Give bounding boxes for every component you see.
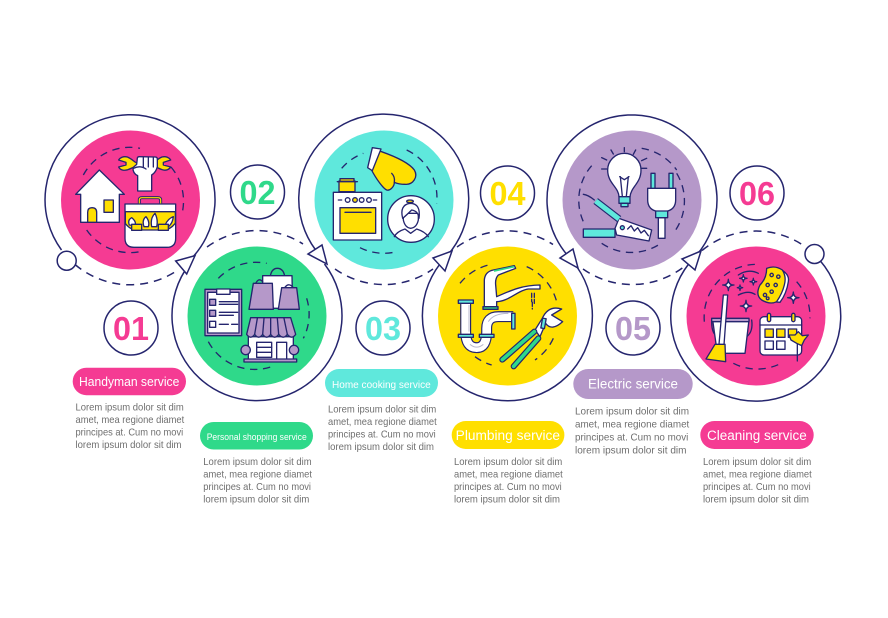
number badge 01: 01 [113,310,149,347]
label: home cooking service [325,369,438,397]
icon: end ring [805,244,824,264]
text: cleaning description: Lorem ipsum dolor sit dim [703,457,811,468]
text: shopping description [203,457,312,506]
text: cooking description: Lorem ipsum dolor sit dim [328,404,436,416]
arrow: step 3 to 4 [433,251,452,271]
panel: cooking circle [314,130,454,270]
text: handyman description: principes at. Cum no movi [76,428,183,438]
text: cleaning description: lorem ipsum dolor sit dim [703,494,809,506]
number badge 01 [104,301,158,355]
text: handyman description: Lorem ipsum dolor sit dim [76,402,184,414]
icon: handyman [76,147,184,253]
text: handyman description: amet, mea regione diamet [76,415,184,426]
text: electric description: principes at. Cum no movi [575,432,688,444]
label: handyman service: Handyman service [79,374,179,389]
number badge 04: 04 [490,175,526,212]
icon: start ring [57,251,76,270]
number badge 05: 05 [615,310,651,347]
number badge 04 [480,166,534,220]
text: electric description: amet, mea regione diamet [575,420,689,430]
text: shopping description: Lorem ipsum dolor sit dim [203,457,312,468]
number badge 03: 03 [365,310,401,347]
connector: flow outline [45,114,841,401]
text: shopping description: amet, mea regione diamet [203,470,312,480]
label: handyman service [73,368,186,395]
icon: cooking [333,148,437,253]
text: plumbing description: principes at. Cum no movi [454,482,562,493]
text: cleaning description [703,457,812,506]
label: cleaning service [700,421,814,449]
label: personal shopping service [200,422,313,450]
text: handyman description: lorem ipsum dolor sit dim [76,440,182,451]
text: electric description: Lorem ipsum dolor sit dim [575,406,689,418]
text: cooking description: amet, mea regione diamet [328,417,437,428]
icon: electric [579,148,684,252]
text: plumbing description: lorem ipsum dolor sit dim [454,494,560,506]
arrow: step 4 to 5 [560,249,578,268]
arrow: step 5 to 6 [682,251,701,270]
label: electric service: Electric service [588,376,678,392]
text: cooking description [328,404,437,453]
text: plumbing description [454,457,563,506]
icon: shopping [205,262,309,369]
label: plumbing service [452,421,564,449]
panel: handyman circle [61,130,200,270]
arrow: step 1 to 2 [176,256,195,274]
text: plumbing description: amet, mea regione diamet [454,470,563,480]
panel: plumbing circle [438,246,577,386]
label: personal shopping service: Personal shopping service [207,432,307,442]
text: electric description: lorem ipsum dolor sit dim [575,446,686,456]
text: cleaning description: amet, mea regione diamet [703,470,812,480]
icon: cleaning [704,264,810,369]
number badge 02 [230,165,284,219]
icon: plumbing [458,264,563,366]
panel: cleaning circle [686,246,826,386]
text: shopping description: principes at. Cum no movi [203,482,311,493]
panel: electric circle [562,130,702,270]
number badge 02: 02 [240,174,276,211]
number badge 05 [606,301,660,355]
label: cleaning service: Cleaning service [707,428,807,443]
label: home cooking service: Home cooking service [332,380,431,391]
text: handyman description [76,402,184,451]
text: cleaning description: principes at. Cum no movi [703,482,811,493]
panel: shopping circle [188,246,326,386]
text: cooking description: principes at. Cum no movi [328,430,436,440]
number badge 06 [730,166,784,220]
number badge 03 [356,301,410,355]
text: electric description [575,406,689,456]
text: shopping description: lorem ipsum dolor sit dim [203,494,309,506]
text: cooking description: lorem ipsum dolor sit dim [328,442,434,453]
arrow: step 2 to 3 [308,245,327,264]
text: plumbing description: Lorem ipsum dolor sit dim [454,457,562,468]
label: electric service [573,369,693,399]
label: plumbing service: Plumbing service [456,428,560,443]
number badge 06: 06 [739,175,775,212]
